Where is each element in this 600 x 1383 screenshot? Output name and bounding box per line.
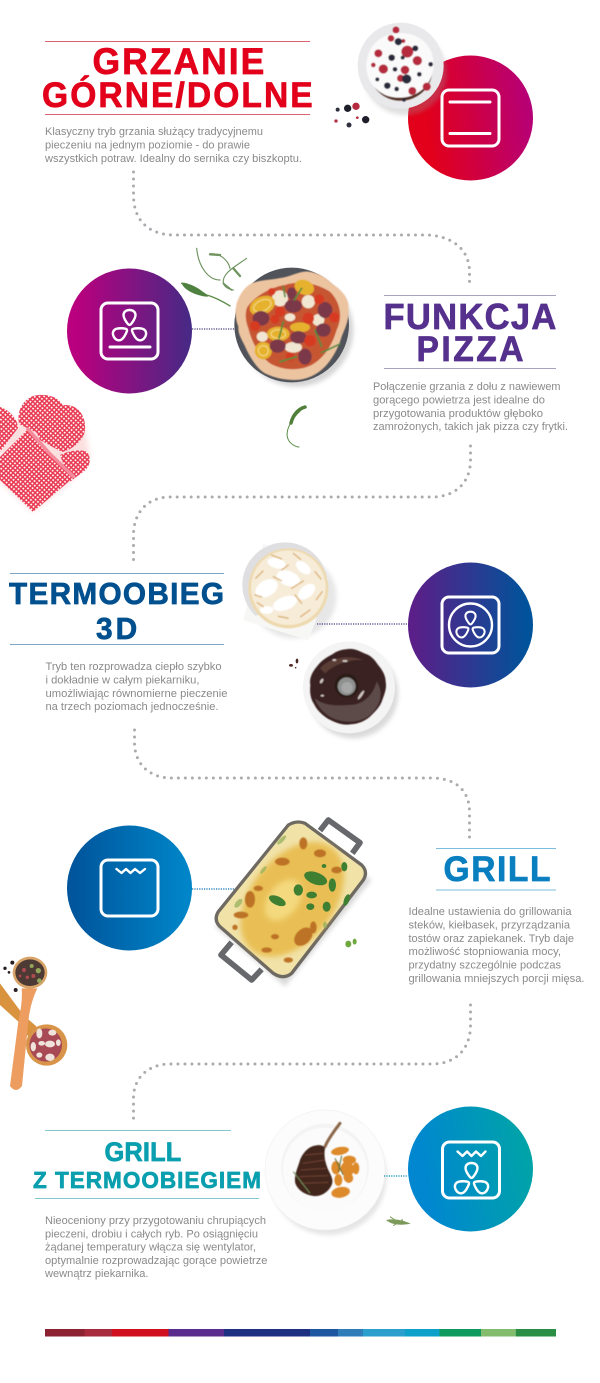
- body text: Idealne ustawienia do grillowania: [408, 906, 572, 918]
- body text: [373, 381, 568, 433]
- section: Grzanie gorne/dolne: [42, 23, 533, 181]
- body text: Nieoceniony przy przygotowaniu chrupiących: [45, 1215, 266, 1227]
- body text: Klasyczny tryb grzania służący tradycyjnemu: [45, 126, 263, 138]
- body text: [408, 906, 584, 985]
- dotted path: step 1 to 2: [134, 172, 470, 286]
- heading rule bottom: [45, 114, 310, 115]
- connector line: [192, 888, 234, 890]
- heading: Funkcja pizza: [384, 297, 556, 369]
- heading: Funkcja pizza: PIZZA: [416, 330, 524, 369]
- body text: optymalnie rozprowadzając gorące powietrze: [45, 1255, 268, 1267]
- heading: Grill: GRILL: [444, 850, 551, 889]
- body text: grillowania mniejszych porcji mięsa.: [408, 973, 584, 985]
- photo: oven mitts: [0, 395, 90, 512]
- body text: [46, 661, 228, 713]
- heading: Grill z termoobiegiem: Z TERMOOBIEGIEM: [33, 1167, 261, 1193]
- heading rule top: [10, 573, 224, 574]
- heading: Termoobieg 3D: [9, 576, 224, 646]
- heading: Termoobieg 3D: 3D: [96, 613, 137, 646]
- body text: Tryb ten rozprowadza ciepło szybko: [46, 661, 222, 673]
- body text: przydatny szczególnie podczas: [408, 960, 561, 972]
- heading: Grzanie gorne/dolne: GRZANIE: [92, 40, 264, 82]
- photo: chocolate bundt cake: [303, 641, 398, 738]
- photo: steak on white plate: [265, 1110, 387, 1235]
- heading: Funkcja pizza: FUNKCJA: [384, 297, 556, 337]
- heading rule top: [384, 295, 556, 296]
- body text: zamrożonych, takich jak pizza czy frytki.: [373, 421, 568, 433]
- body text: pieczeni, drobiu i całych ryb. Po osiągnięciu: [45, 1228, 258, 1240]
- section: Funkcja pizza: [0, 248, 568, 512]
- section: Grill: [0, 820, 584, 1090]
- body text: steków, kiełbasek, przyrządzania: [408, 920, 571, 932]
- connector line: [192, 328, 234, 330]
- herb below pizza: [287, 407, 305, 447]
- heading: Termoobieg 3D: TERMOOBIEG: [9, 576, 224, 611]
- dotted path: step 4 to 5: [134, 1005, 470, 1123]
- photo: berry cake on plate: [358, 23, 447, 115]
- body text: Połączenie grzania z dołu z nawiewem: [373, 381, 560, 393]
- body text: tostów oraz zapiekanek. Tryb daje: [408, 933, 574, 945]
- body text: [44, 1215, 267, 1280]
- heading rule bottom: [35, 1198, 259, 1199]
- colour bar footer: [45, 1329, 556, 1336]
- rosemary sprig: [386, 1217, 411, 1226]
- scattered berries: [334, 103, 369, 127]
- connector line: [317, 623, 408, 625]
- body text: wszystkich potraw. Idealny do sernika czy biszkoptu.: [44, 153, 302, 165]
- body text: pieczeniu na jednym poziomie - do prawie: [45, 140, 250, 152]
- heading rule bottom: [10, 644, 224, 645]
- circle icon: pizza function: [67, 268, 192, 394]
- body text: możliwość stopniowania mocy,: [408, 946, 561, 958]
- body text: wewnątrz piekarnika.: [44, 1268, 148, 1280]
- chocolate crumbs: [289, 659, 298, 668]
- heading: Grill z termoobiegiem: [33, 1137, 261, 1193]
- dotted path: step 2 to 3: [134, 446, 470, 563]
- heading rule top: [45, 1130, 231, 1131]
- herbs above pizza: [182, 248, 247, 306]
- section: Termoobieg 3D: [9, 542, 533, 738]
- section: Grill z termoobiegiem: [33, 1106, 533, 1280]
- connector line: [384, 1175, 408, 1177]
- circle icon: top and bottom heat: [408, 56, 533, 180]
- heading: Grill z termoobiegiem: GRILL: [104, 1137, 181, 1167]
- body text: przygotowania produktów głęboko: [373, 408, 543, 420]
- heading rule bottom: [436, 890, 556, 891]
- circle icon: grill: [67, 826, 192, 950]
- body text: [44, 126, 302, 165]
- circle icon: grill with hot air: [408, 1106, 533, 1232]
- photo: meringue pie: [242, 542, 337, 640]
- circle icon: 3D hot air: [408, 562, 533, 688]
- dotted path: step 3 to 4: [134, 730, 470, 838]
- photo: baked casserole dish: [215, 820, 372, 987]
- heading rule top: [436, 848, 556, 849]
- heading rule top: [45, 41, 310, 42]
- parsley leaf: [345, 939, 357, 947]
- heading rule bottom: [384, 368, 556, 369]
- body text: na trzech poziomach jednocześnie.: [46, 701, 218, 713]
- photo: wooden spoons with spices: [0, 957, 67, 1090]
- body text: umożliwiając równomierne pieczenie: [46, 688, 228, 700]
- body text: żądanej temperatury włącza się wentylator,: [45, 1242, 256, 1254]
- body text: gorącego powietrza jest idealne do: [373, 394, 545, 406]
- heading: Grzanie gorne/dolne: GÓRNE/DOLNE: [42, 74, 313, 115]
- body text: i dokładnie w całym piekarniku,: [46, 674, 200, 686]
- photo: pizza on plate: [234, 268, 353, 387]
- heading: Grzanie gorne/dolne: [42, 40, 313, 115]
